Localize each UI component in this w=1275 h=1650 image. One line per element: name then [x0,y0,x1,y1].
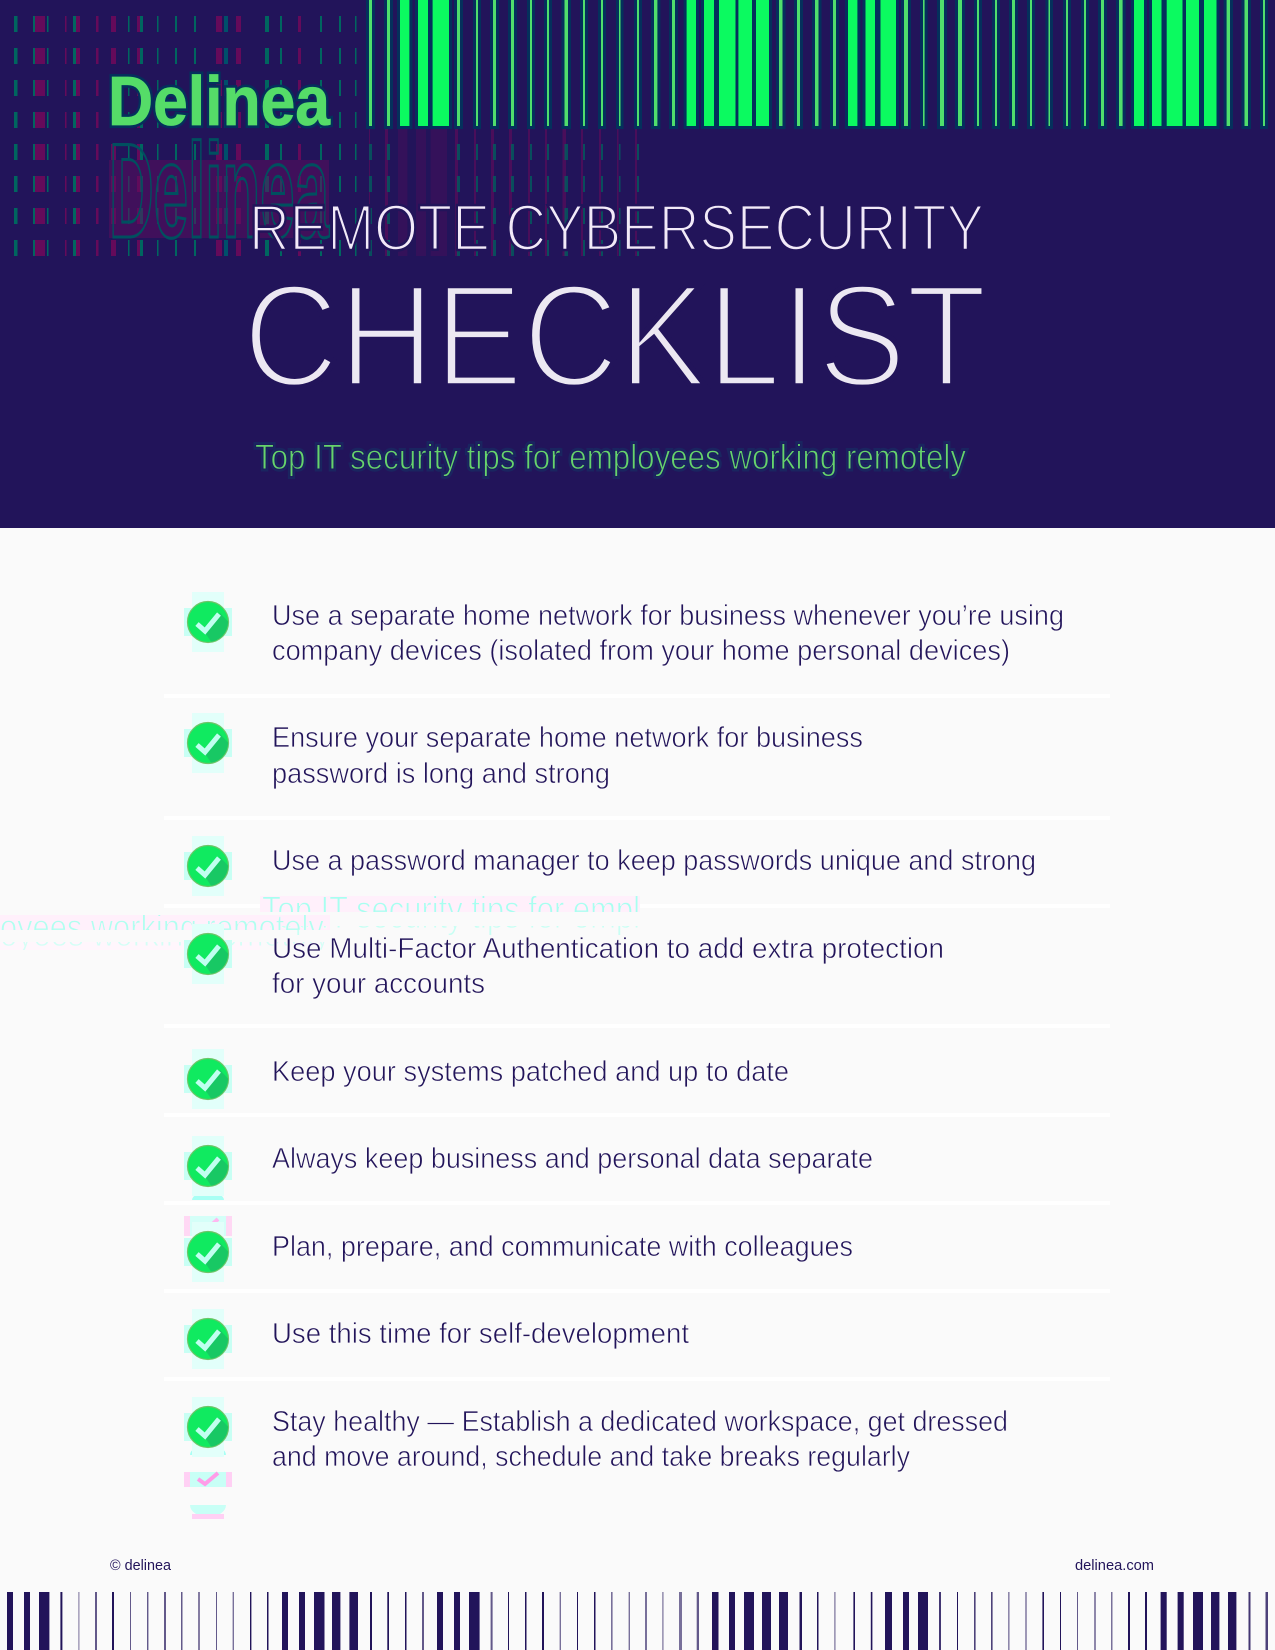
item text: password is long and strong [272,758,610,790]
top barcode [369,0,1265,126]
ghost barcode artefact, right of logo [369,129,639,256]
ghost icon artefacts [184,1192,232,1519]
separators [164,694,1110,1381]
item text: Ensure your separate home network for business [272,722,863,754]
top barcode halo [369,0,1265,126]
subtitle: Top IT security tips for employees working remotely [255,438,966,477]
item 6 [184,1136,873,1196]
heading: remote cybersecurity: REMOTE CYBERSECURITY [249,191,984,264]
footer: copyright: © delinea [110,1557,172,1574]
ghost text artefact [0,890,640,954]
subtitle: Top IT security tips for employees working remotely [255,438,966,477]
icon: check [184,713,238,773]
panel: checklist [0,592,1110,1519]
icon: check [184,1397,238,1457]
icon: check [184,924,238,984]
item text: and move around, schedule and take breaks regularly [272,1441,910,1473]
item text: Plan, prepare, and communicate with colleagues [272,1231,853,1263]
ghost logo artefact [109,138,330,240]
item text: Use this time for self-development [272,1318,689,1350]
item 9 [184,1397,1008,1473]
item text: Always keep business and personal data separate [272,1143,873,1175]
item text: for your accounts [272,968,485,1000]
item text: Stay healthy — Establish a dedicated workspace, get dressed [272,1406,1008,1438]
heading: checklist: CHECKLIST [243,254,987,417]
item text: Use Multi-Factor Authentication to add extra protection [272,933,944,965]
item text: Use a password manager to keep passwords unique and strong [272,845,1036,877]
bottom barcode [7,1592,1268,1650]
footer: website: delinea.com [1075,1557,1154,1574]
logo: Delinea [108,62,331,140]
item 3 [184,836,1036,896]
item 7 [184,1222,853,1282]
panel: header [0,0,1275,528]
icon: check [184,1049,238,1109]
icon: check [184,1222,238,1282]
item 1 [184,592,1064,667]
item 5 [184,1049,789,1109]
icon: check [184,1309,238,1369]
logo: Delinea [108,62,331,140]
item 8 [184,1309,689,1369]
ghost barcode artefact, left [14,0,356,256]
item text: Use a separate home network for business whenever you’re using [272,600,1064,632]
ghost logo artefact: Delinea [109,115,330,266]
icon: check [184,592,238,652]
icon: check [184,836,238,896]
item text: Keep your systems patched and up to date [272,1056,789,1088]
item 4 [184,924,944,1000]
item text: company devices (isolated from your home personal devices) [272,635,1010,667]
item 2 [184,713,863,790]
icon: check [184,1136,238,1196]
